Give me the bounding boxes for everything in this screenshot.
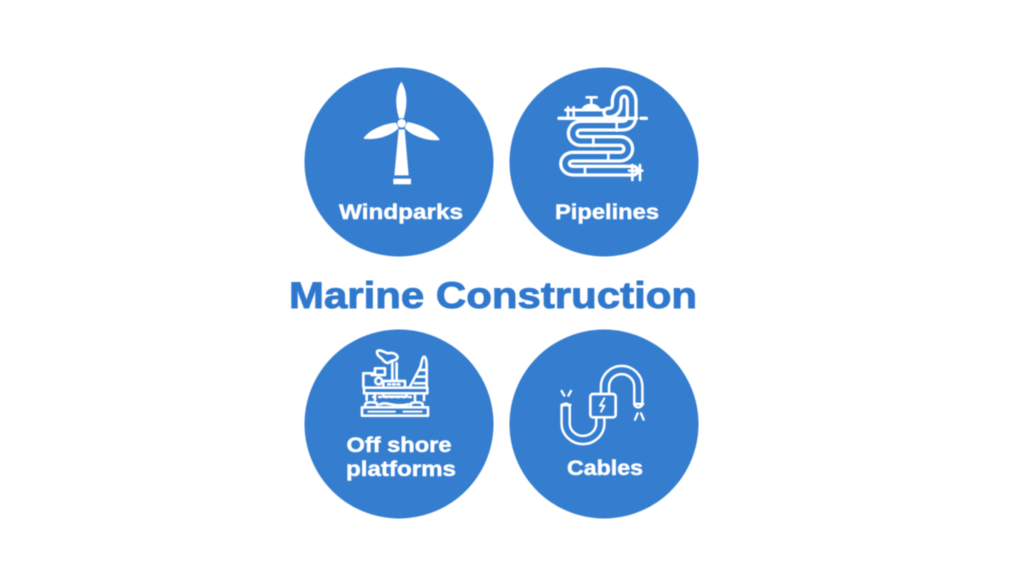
title: Marine Construction [289,275,697,316]
icon: offshore platform [362,350,428,416]
label: Pipelines: Pipelines [555,200,659,224]
icon: pipeline [559,92,646,180]
label: Off shore platforms: platforms [346,457,456,481]
panel: pipelines [510,68,698,256]
label: Windparks: Windparks [339,200,463,224]
icon: wind turbine [363,82,440,184]
label: Off shore platforms: Off shore [346,433,452,457]
panel: cables [510,330,698,518]
label: Cables: Cables [567,456,643,480]
panel: off shore platforms [304,330,494,518]
panel: windparks [304,68,494,256]
label: Off shore platforms [346,433,456,481]
icon: cable with power box [562,370,644,440]
